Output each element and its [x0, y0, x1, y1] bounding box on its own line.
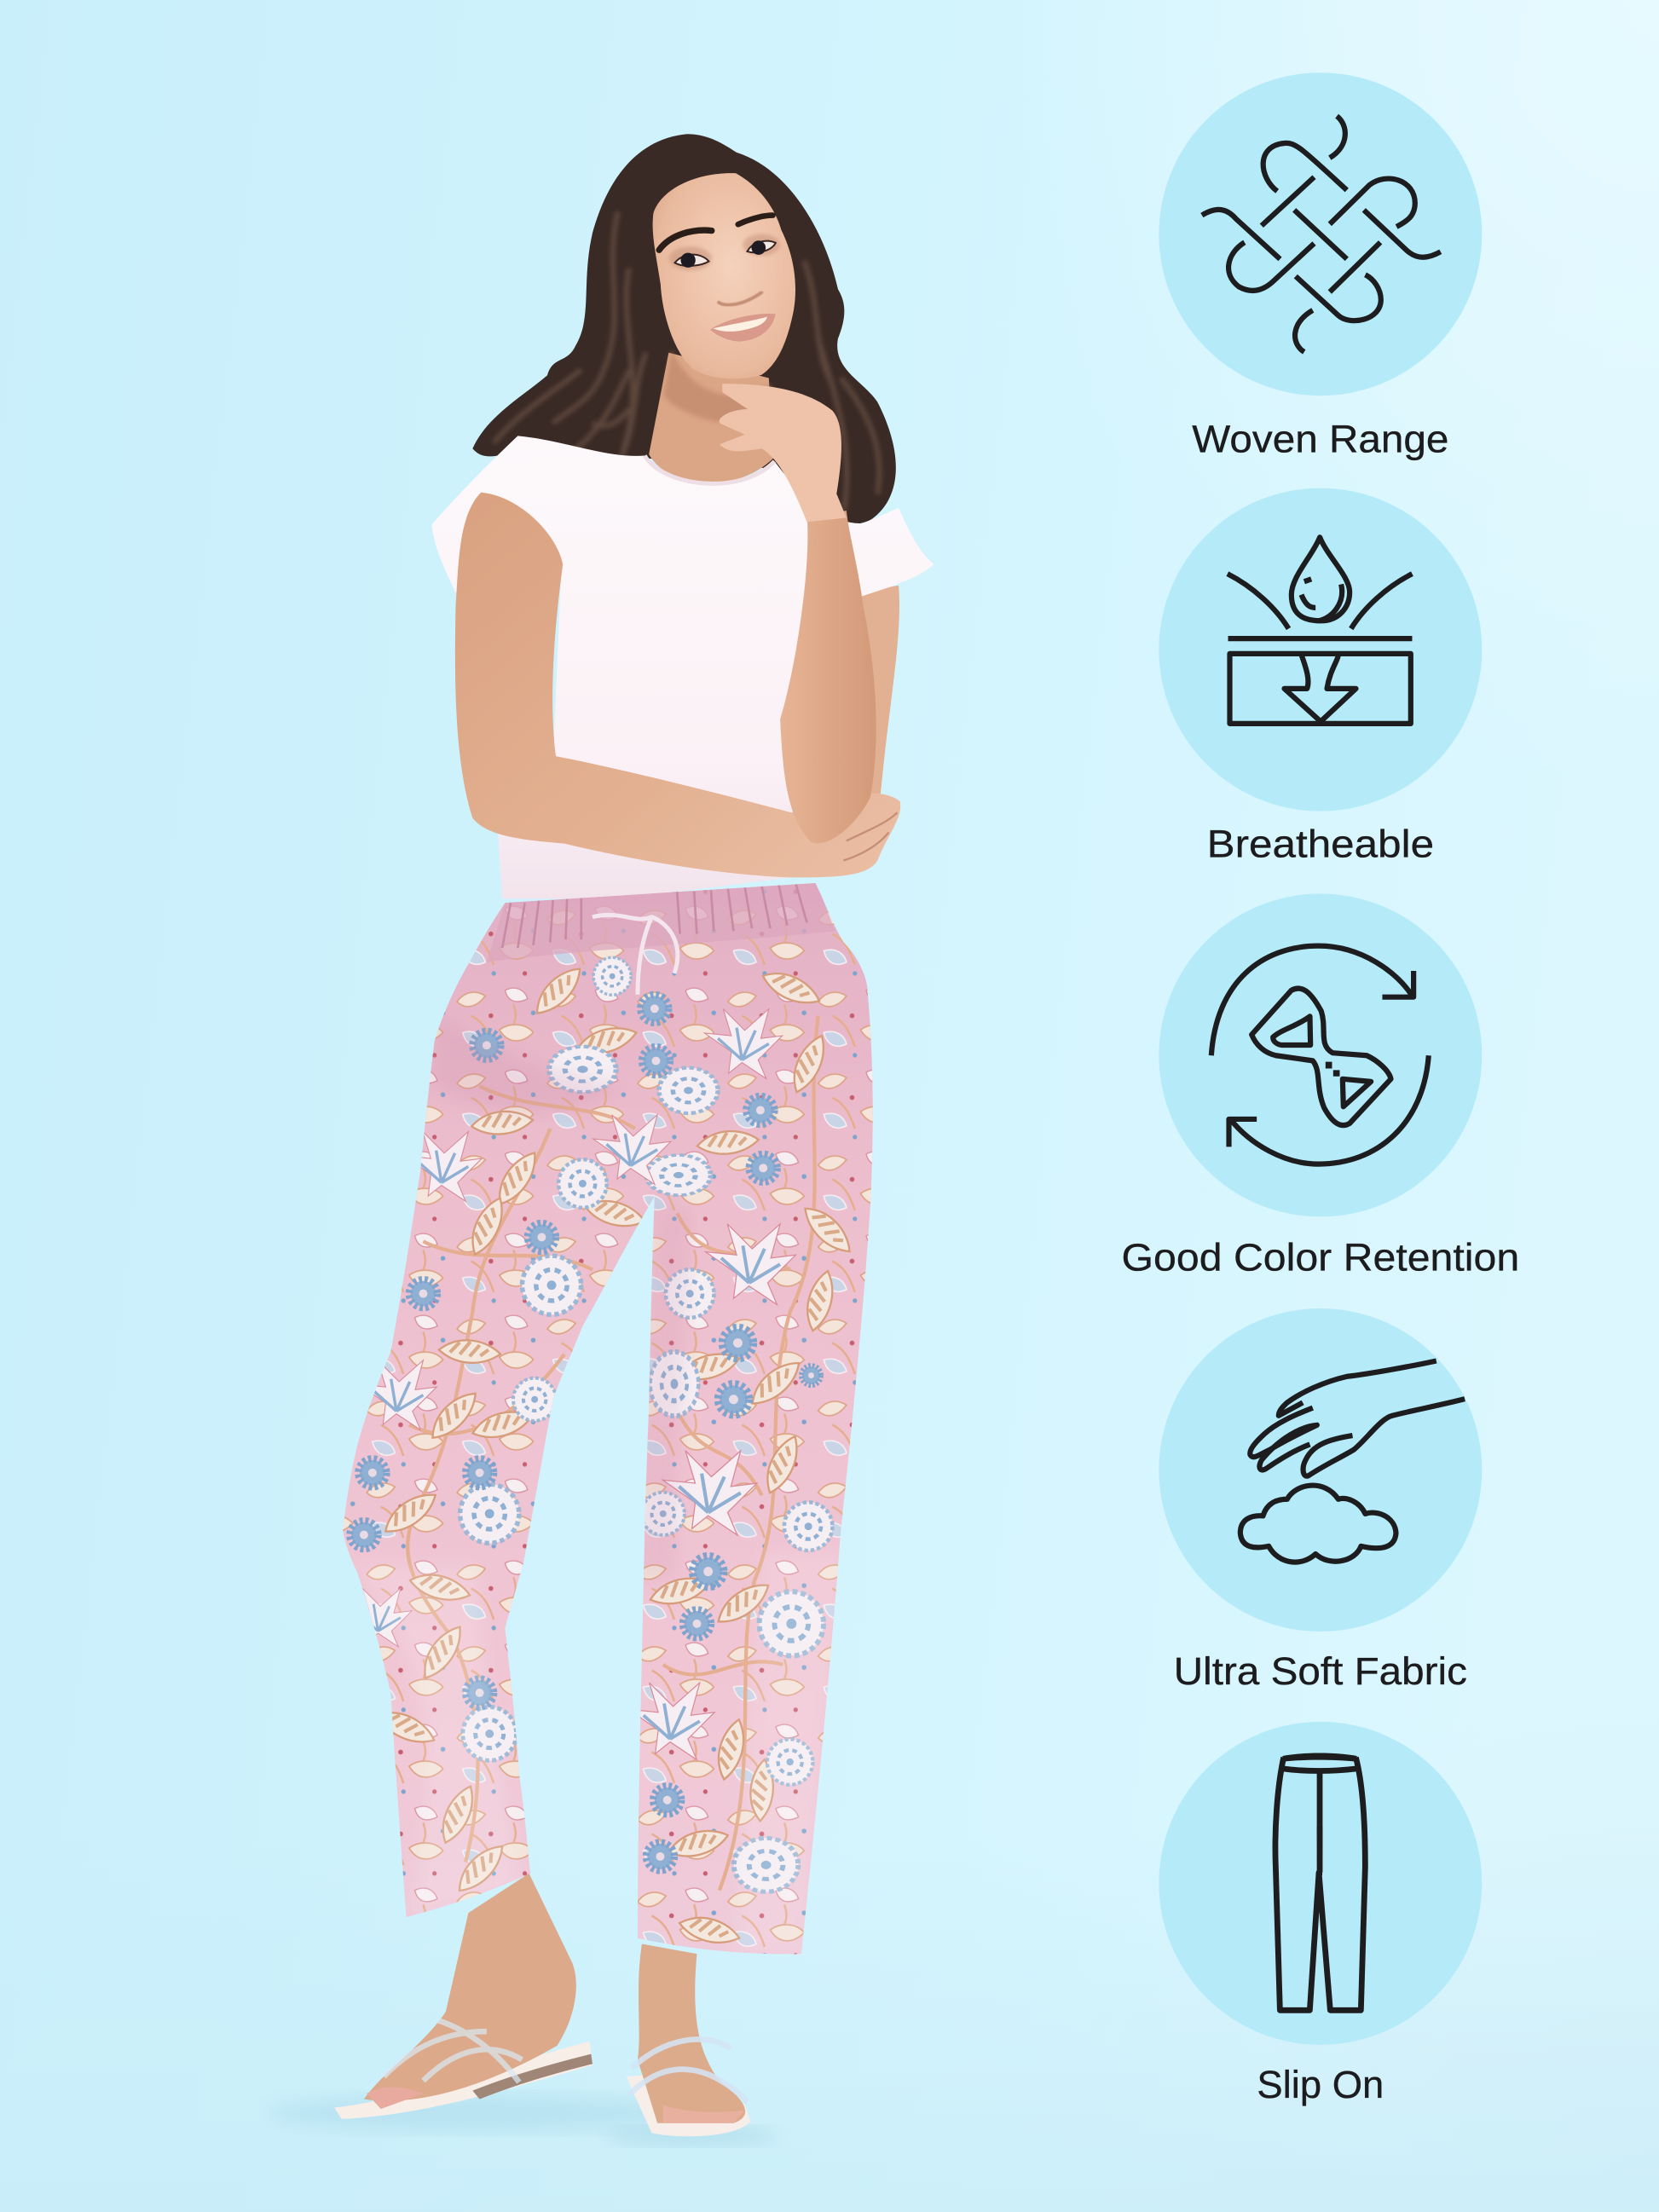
- left arm: [455, 493, 900, 877]
- label: Ultra Soft Fabric: [1174, 1649, 1467, 1693]
- waistband: [487, 881, 835, 962]
- neck shadow under chin: [663, 349, 771, 425]
- right sandal and foot: [627, 1944, 750, 2136]
- icon: hand touching cloud: [1240, 1360, 1465, 1562]
- feature: breatheable: [1159, 488, 1482, 866]
- label: Good Color Retention: [1122, 1235, 1519, 1279]
- face: [653, 173, 795, 378]
- label: Woven Range: [1192, 417, 1448, 460]
- left sandal and foot: [334, 1874, 592, 2119]
- fabric shading: [430, 1030, 607, 1115]
- icon: woven knot: [1202, 116, 1441, 352]
- circle: [1159, 1308, 1482, 1632]
- circle: [1159, 488, 1482, 811]
- circle: [1159, 893, 1482, 1216]
- label: Slip On: [1257, 2063, 1384, 2106]
- icon: slip-on pants: [1275, 1753, 1365, 2010]
- back hair: [472, 134, 896, 525]
- label: Breatheable: [1207, 823, 1434, 866]
- pants: [325, 875, 889, 1975]
- icon: water drop on fabric: [1228, 537, 1412, 724]
- t-shirt: [431, 436, 934, 898]
- feature: ultra soft fabric: [1159, 1308, 1482, 1693]
- right upper arm: [832, 586, 899, 840]
- feature: slip on: [1159, 1722, 1482, 2106]
- hand at chin: [720, 384, 847, 522]
- icon: rotating hourglass: [1211, 946, 1429, 1164]
- feature: good color retention: [1122, 893, 1519, 1279]
- drawstring: [592, 915, 678, 995]
- neck: [649, 353, 773, 483]
- finger lines on lower hand: [844, 812, 897, 861]
- model photo illustration: [325, 134, 934, 2136]
- circle: [1159, 72, 1482, 396]
- t-shirt neckline: [645, 456, 774, 483]
- forearm propped to chin: [780, 511, 876, 843]
- circle: [1159, 1722, 1482, 2045]
- hair highlights: [494, 211, 879, 511]
- feature: woven range: [1159, 72, 1482, 460]
